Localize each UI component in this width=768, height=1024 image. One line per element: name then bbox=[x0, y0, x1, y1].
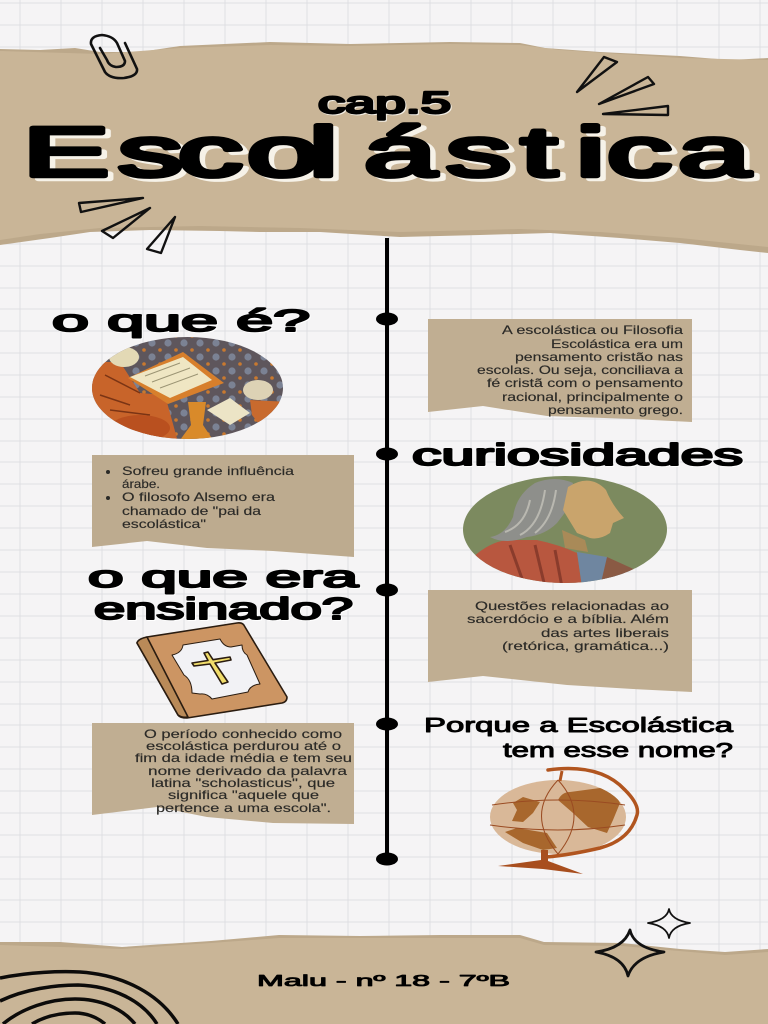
heading: o que é: o que é? bbox=[52, 303, 310, 338]
text: definition: Escolástica era um bbox=[551, 337, 683, 351]
panel: history bbox=[92, 723, 354, 824]
icon: spark lines top right bbox=[577, 57, 668, 115]
heading: porque a Escolástica tem esse nome: Porque a Escolástica bbox=[424, 715, 734, 737]
panel: definition bbox=[428, 319, 692, 422]
text: definition: escolas. Ou seja, conciliava a bbox=[477, 363, 683, 377]
text: definition: pensamento grego. bbox=[548, 403, 683, 417]
panel: curriculum bbox=[428, 590, 692, 692]
text: curriculum bbox=[467, 599, 669, 653]
text: influence list: O filosofo Alsemo era bbox=[122, 490, 275, 504]
text: influence list bbox=[122, 464, 294, 531]
icon: paperclip bbox=[91, 35, 137, 78]
text: history bbox=[135, 727, 352, 815]
text: influence list: árabe. bbox=[122, 477, 160, 491]
text: influence list: chamado de "pai da bbox=[122, 504, 261, 518]
icon: spark lines bottom left bbox=[79, 198, 175, 253]
text: curriculum: (retórica, gramática...) bbox=[502, 639, 669, 653]
text: definition: A escolástica ou Filosofia bbox=[502, 323, 683, 337]
icon: large star bbox=[596, 930, 664, 976]
panel: influence bbox=[92, 455, 354, 557]
footer credit: Malu - nº 18 - 7ºB bbox=[257, 973, 510, 990]
title: Escolástica bbox=[23, 113, 750, 191]
heading: porque a Escolástica tem esse nome bbox=[424, 715, 734, 762]
text: influence list: Sofreu grande influência bbox=[122, 464, 294, 478]
text: curriculum: das artes liberais bbox=[541, 626, 669, 640]
text: influence list: escolástica" bbox=[122, 517, 206, 531]
text: definition: racional, principalmente o bbox=[502, 390, 683, 404]
timeline bbox=[376, 238, 398, 866]
bullets bbox=[106, 470, 110, 500]
heading: o que era ensinado bbox=[88, 559, 360, 626]
text: history: fim da idade média e tem seu bbox=[135, 751, 352, 765]
text: history: pertence a uma escola". bbox=[156, 801, 331, 815]
icon: small star bbox=[648, 909, 690, 938]
text: history: significa "aquele que bbox=[168, 788, 319, 802]
heading: porque a Escolástica tem esse nome: tem esse nome? bbox=[503, 740, 733, 762]
image: portrait of Anselm bbox=[460, 474, 670, 587]
text: curriculum: sacerdócio e a bíblia. Além bbox=[467, 612, 669, 626]
text: history: nome derivado da palavra bbox=[148, 764, 347, 778]
subtitle: cap.5 bbox=[318, 85, 451, 120]
text: history: latina "scholasticus", que bbox=[151, 776, 335, 790]
heading: curiosidades: curiosidades bbox=[412, 437, 743, 472]
image: medieval scholars bbox=[88, 335, 290, 442]
text: definition bbox=[477, 323, 683, 417]
heading: o que era ensinado: ensinado? bbox=[94, 591, 353, 626]
text: definition: fé cristã com o pensamento bbox=[487, 376, 683, 390]
text: history: escolástica perdurou até o bbox=[146, 739, 341, 753]
icon: globe bbox=[490, 769, 638, 874]
title banner bbox=[0, 42, 768, 253]
text: curriculum: Questões relacionadas ao bbox=[475, 599, 669, 613]
icon: bible bbox=[137, 623, 287, 718]
icon: concentric arcs bbox=[0, 972, 178, 1024]
text: definition: pensamento cristão nas bbox=[515, 350, 683, 364]
footer banner bbox=[0, 935, 768, 1024]
text: history: O período conhecido como bbox=[144, 727, 342, 741]
heading: o que era ensinado: o que era bbox=[88, 559, 360, 594]
